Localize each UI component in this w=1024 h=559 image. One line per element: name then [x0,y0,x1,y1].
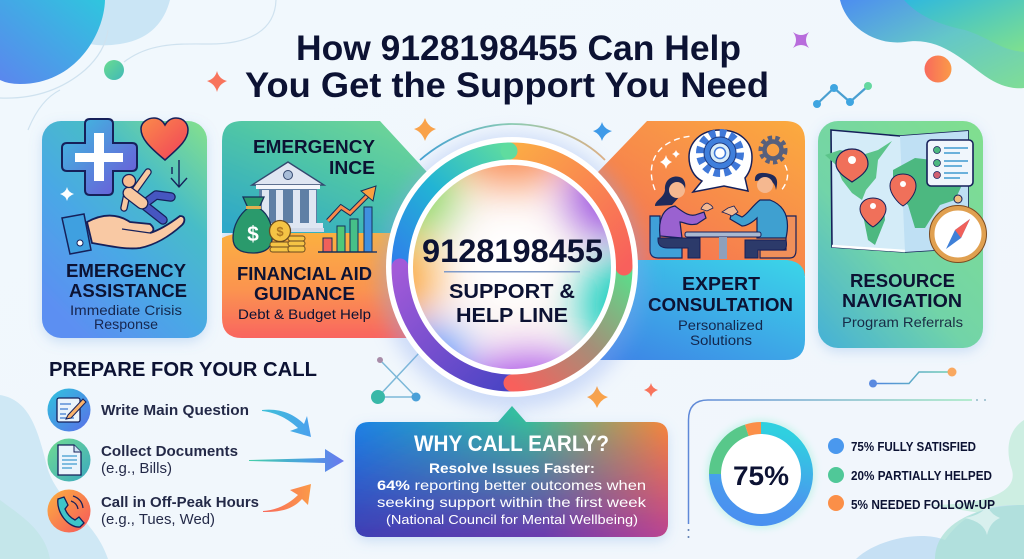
decorative orange dot [924,56,952,82]
icon: bar chart with arrow [318,186,377,252]
card text: Debt & Budget Help [238,306,371,322]
decorative connector [869,368,956,388]
icon: down arrow [171,160,187,187]
panel: resource navigation [818,121,986,348]
icon: phone [48,490,90,532]
arrow: documents to callout [249,449,344,472]
chart: satisfaction donut: 75% [733,461,789,491]
icon: write question [48,388,90,432]
hub text: SUPPORT & [449,280,575,303]
icon: map pins [836,149,916,227]
icon: heart [141,118,188,160]
card text [237,137,375,322]
card text: EXPERT [682,274,760,294]
decorative red star [207,71,227,92]
card text: GUIDANCE [254,284,355,304]
decorative corner frame [688,399,986,538]
decorative red star lower [644,383,658,397]
step text [101,444,238,477]
card text [648,274,793,348]
card text: NAVIGATION [842,291,962,311]
arrow: question to callout [262,410,311,437]
icon: falling person [122,172,171,220]
title: How 9128198455 Can Help [296,29,741,68]
callout text: Resolve Issues Faster: [429,460,595,476]
card text: FINANCIAL AID [237,264,372,284]
title: You Get the Support You Need [245,66,769,105]
icon: documents [48,438,90,482]
legend: 20% PARTIALLY HELPED [851,469,992,483]
step text: (e.g., Tues, Wed) [101,512,215,528]
panel: financial aid [222,121,426,338]
ring segments [400,142,624,383]
callout text: (National Council for Mental Wellbeing) [386,512,638,527]
decorative blue star [593,122,612,141]
title [245,29,769,105]
callout text: seeking support within the first week [377,494,647,510]
icon: money bag: $ [247,223,259,246]
card text: CONSULTATION [648,295,793,315]
card text: Immediate Crisis [70,302,182,318]
step text: Collect Documents [101,444,238,460]
card text: ASSISTANCE [69,281,187,301]
icon: coins: $ [276,224,284,239]
panel: expert consultation [598,121,805,360]
icon: money bag [233,197,272,253]
hub text: HELP LINE [456,304,568,327]
section: prepare for your call [48,358,317,532]
icon: sparkle [60,187,74,201]
icon: checklist card [927,140,973,186]
card text [66,261,187,332]
icon: bank [252,162,324,232]
heading: PREPARE FOR YOUR CALL [49,358,317,381]
step text [101,495,259,528]
card text: Solutions [690,332,752,348]
decorative orange star lower [587,386,608,408]
step text: Write Main Question [101,403,249,419]
step text: Call in Off-Peak Hours [101,495,259,511]
legend: 75% FULLY SATISFIED [851,440,976,454]
chart: satisfaction donut [715,428,807,520]
step text: (e.g., Bills) [101,461,172,477]
icon: compass [930,195,986,262]
icon: open hand [62,214,184,254]
arrow: off-peak to callout [263,484,311,512]
decorative orange star [414,118,436,141]
callout: why call early [355,406,668,537]
legend [828,438,995,512]
card text [842,271,963,330]
icon: coins [270,220,305,252]
icon: world map [825,130,968,252]
callout text [377,431,647,527]
decorative purple cross star [793,32,809,48]
card text: EMERGENCY [253,137,375,157]
card text: Response [94,316,158,332]
callout text: WHY CALL EARLY? [414,431,609,456]
icon: dashed arcs and sparkles [651,136,788,192]
decorative green dot [104,60,124,80]
card text: Program Referrals [842,314,963,330]
decorative arc above hub [420,124,605,160]
legend: 5% NEEDED FOLLOW-UP [851,498,995,512]
decorative line chart [813,82,872,108]
hub: central circle [368,128,654,416]
decorative node network [371,352,420,404]
hub disk gradient [413,165,611,369]
icon: small gear [762,138,784,162]
callout text: 64% reporting better outcomes when [377,477,646,493]
icon: speech bubble with gear [689,130,752,192]
card text: Personalized [678,317,763,333]
icon: medical cross [62,119,137,195]
card text: EMERGENCY [66,261,186,281]
card text: RESOURCE [850,271,955,291]
hub text [422,233,603,327]
hub text: 9128198455 [422,233,603,269]
card text: INCE [329,158,375,178]
icon: two people at table [650,173,796,259]
panel: emergency assistance [42,118,207,338]
